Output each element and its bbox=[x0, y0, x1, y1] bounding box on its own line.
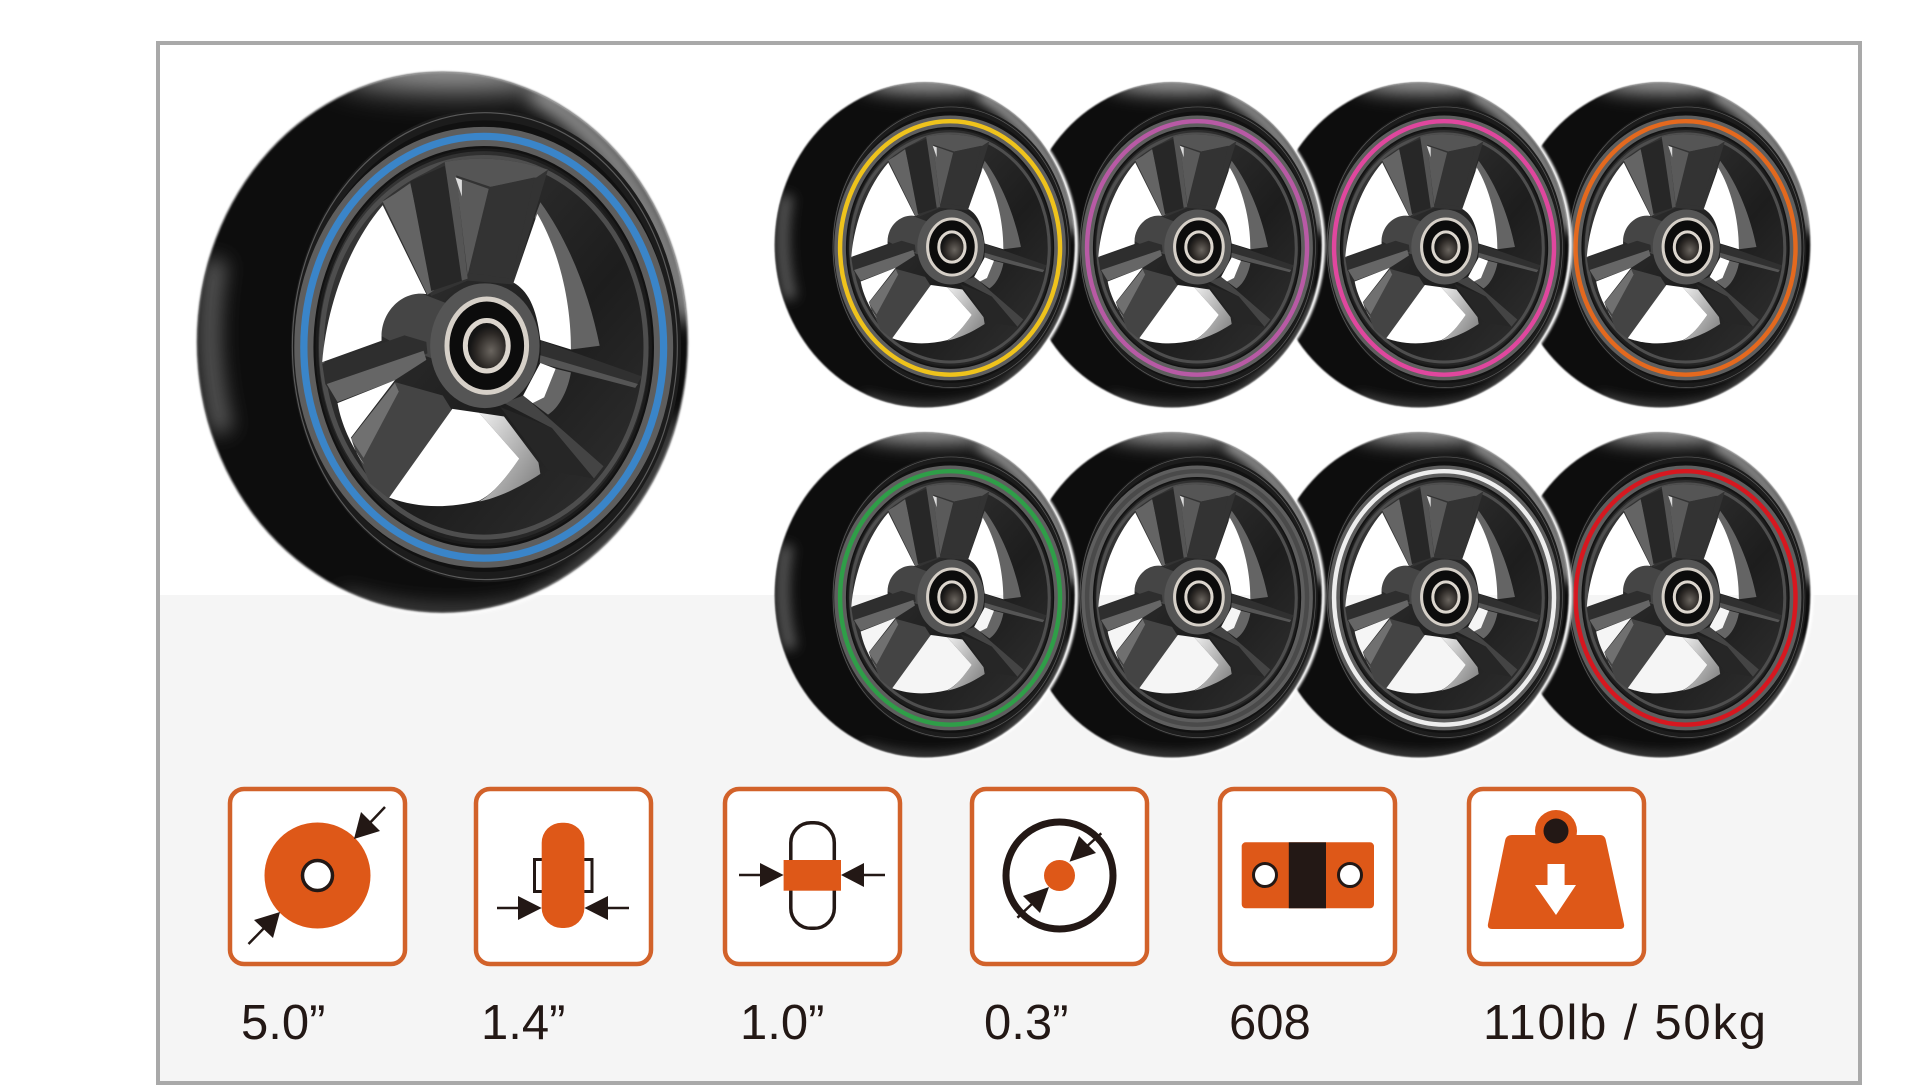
wheel: green ring bbox=[775, 420, 1078, 759]
label: bore value: 0.3” bbox=[984, 996, 1068, 1050]
wheel: orange ring bbox=[1510, 70, 1814, 409]
label: tire width value: 1.4” bbox=[481, 996, 565, 1050]
wheel: red ring bbox=[1510, 420, 1814, 759]
icon: load weight bbox=[1469, 789, 1644, 964]
icon: bore diameter bbox=[972, 789, 1147, 964]
icon: wheel diameter bbox=[230, 789, 405, 964]
wheel: white ring bbox=[1269, 420, 1572, 759]
wheel: yellow ring bbox=[775, 70, 1078, 409]
icon: tire width bbox=[476, 789, 651, 964]
icon: hub width bbox=[725, 789, 900, 964]
label: load value: 110lb / 50kg bbox=[1483, 996, 1766, 1050]
wheel: grey ring bbox=[1022, 420, 1325, 759]
label: bearing value: 608 bbox=[1229, 996, 1311, 1050]
icon: bearing 608 bbox=[1220, 789, 1395, 964]
label: hub width value: 1.0” bbox=[740, 996, 824, 1050]
label: diameter value: 5.0” bbox=[241, 996, 325, 1050]
wheel: purple ring bbox=[1022, 70, 1325, 409]
wheel: large blue ring bbox=[197, 51, 693, 615]
wheel: pink ring bbox=[1269, 70, 1572, 409]
